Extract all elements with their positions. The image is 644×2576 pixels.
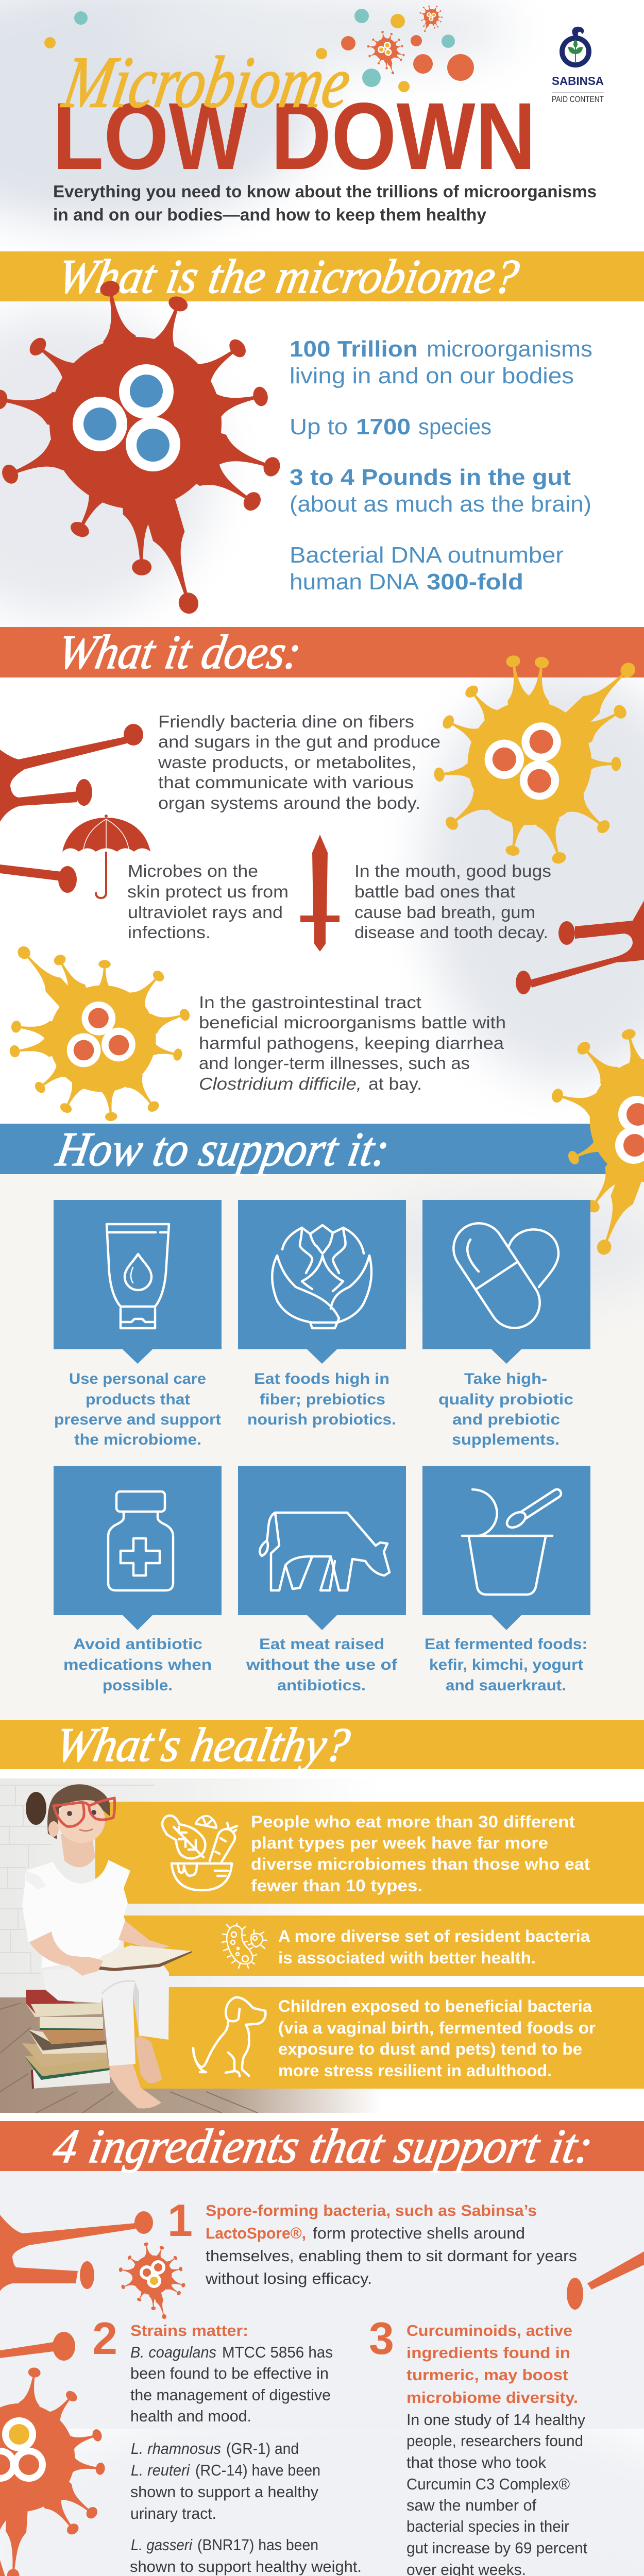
tile: cow: Eat meat raised [259, 1636, 384, 1653]
ingredient 3: Curcuminoids, active [406, 2321, 572, 2340]
ingredient 1: LactoSpore®, [206, 2224, 306, 2242]
text: microbes on the skin [127, 861, 289, 942]
yellow fact band 2 [124, 1916, 644, 1976]
text: microbes on the skin: skin protect us from [127, 882, 289, 901]
feet [135, 2036, 162, 2083]
ingredient 2: the management of digestive [130, 2386, 331, 2404]
tile: artichoke: Eat foods high in [254, 1370, 389, 1387]
tile: cow: without the use of [246, 1656, 398, 1673]
microbiome facts: living in and on our bodies [290, 363, 574, 388]
ingredient 2: (GR-1) and [226, 2439, 299, 2458]
section heading: what's healthy: What's healthy? [52, 1719, 354, 1772]
ingredient 2: been found to be effective in [130, 2364, 329, 2382]
text: in the mouth: In the mouth, good bugs [354, 861, 551, 880]
microbiome facts: 100 Trillion [290, 336, 418, 362]
microbiome facts: 1700 [356, 414, 411, 439]
ingredient 2: (BNR17) has been [197, 2536, 318, 2554]
microbiome facts: microorganisms [427, 336, 592, 362]
tile: yogurt cup [422, 1466, 590, 1694]
tile: personal care tube: Use personal care [69, 1370, 206, 1387]
text: gastrointestinal tract: harmful pathogens, keeping diarrhea [199, 1033, 504, 1053]
ingredient 3: Curcumin C3 Complex® [406, 2475, 570, 2493]
ingredient 2: L. rhamnosus [131, 2439, 221, 2458]
open book [92, 1945, 192, 1968]
text: friendly bacteria: organ systems around the body. [158, 793, 420, 812]
ingredient 2: (RC-14) have been [195, 2461, 320, 2479]
microbiome facts: human DNA [290, 569, 419, 595]
decoration: orange virus arms left [0, 2211, 153, 2361]
header: decorative dots and small viruses [44, 0, 474, 92]
tile: cow [238, 1466, 406, 1694]
text: gastrointestinal tract [199, 993, 506, 1093]
ingredient 3: turmeric, may boost [406, 2366, 568, 2384]
section heading: what is the microbiome: What is the microbiome? [54, 250, 523, 303]
tile: antibiotic bottle: possible. [103, 1677, 173, 1694]
section heading: what it does: What it does: [54, 626, 306, 679]
tile: personal care tube: products that [86, 1391, 190, 1408]
icon: large red virus [0, 278, 284, 618]
text: in the mouth [354, 861, 551, 942]
tile: artichoke: nourish probiotics. [247, 1411, 396, 1428]
icon: yellow virus left [0, 890, 224, 1160]
books stack [22, 1990, 110, 2089]
yellow fact band 1 [95, 1802, 644, 1904]
ingredient 3: bacterial species in their [406, 2517, 569, 2535]
tile: capsule and heart pill: quality probiotic [438, 1391, 573, 1408]
ingredient 2: Strains matter: [130, 2321, 248, 2340]
shirt [22, 1860, 130, 1968]
ingredient 2: health and mood. [130, 2407, 251, 2425]
text: gastrointestinal tract: In the gastrointestinal tract [199, 993, 421, 1012]
ingredient 3 [369, 2313, 587, 2576]
logo: Sabinsa: PAID CONTENT [552, 95, 604, 104]
ingredient 1: 1 [167, 2195, 193, 2246]
tile: antibiotic bottle: medications when [63, 1656, 212, 1673]
tile: artichoke: fiber; prebiotics [260, 1391, 385, 1408]
title: Microbiome [57, 41, 357, 123]
ingredient 2 [92, 2313, 362, 2575]
forearms [29, 1931, 103, 1976]
section heading: how to support it: How to support it: [52, 1123, 394, 1176]
ingredient 2: shown to support a healthy [130, 2483, 318, 2501]
ingredient 3: ingredients found in [406, 2344, 570, 2362]
subtitle: in and on our bodies—and how to keep them healthy [53, 205, 487, 224]
ingredient 3: that those who took [406, 2453, 547, 2471]
icon: orange virus left [0, 2340, 140, 2576]
ingredient 2: L. reuteri [131, 2461, 190, 2479]
photo: girl with red glasses sitting on books [22, 1784, 192, 2109]
decoration: red virus arms left [0, 724, 143, 893]
ingredient 1 [167, 2195, 577, 2287]
tile: antibiotic bottle: Avoid antibiotic [73, 1636, 202, 1653]
ingredient 3: gut increase by 69 percent [406, 2539, 587, 2557]
text: gastrointestinal tract: beneficial microorganisms battle with [199, 1013, 506, 1032]
microbiome facts: Up to [290, 414, 348, 439]
section heading: what it does [0, 626, 644, 679]
ingredient 3: In one study of 14 healthy [406, 2411, 585, 2429]
ingredient 3: microbiome diversity. [406, 2388, 578, 2406]
yellow fact band 1: plant types per week have far more [251, 1834, 548, 1852]
icon: yellow virus right [388, 604, 644, 904]
subtitle [53, 182, 597, 224]
tile: antibiotic bottle [54, 1466, 222, 1694]
ingredient 2: L. gasseri [131, 2536, 193, 2554]
ingredient 1: form protective shells around [313, 2224, 525, 2242]
yellow fact band 3: exposure to dust and pets) tend to be [278, 2040, 582, 2058]
text: in the mouth: disease and tooth decay. [354, 923, 548, 942]
tile: cow: antibiotics. [277, 1677, 366, 1694]
microbiome facts: Bacterial DNA outnumber [290, 543, 564, 568]
microbiome facts: (about as much as the brain) [290, 492, 591, 517]
text: friendly bacteria: that communicate with various [158, 773, 414, 792]
section heading: how to support it [0, 1123, 644, 1176]
text: gastrointestinal tract: at bay. [368, 1074, 422, 1093]
ingredient 3: people, researchers found [406, 2432, 583, 2450]
microbiome facts: 3 to 4 Pounds in the gut [290, 465, 571, 490]
yellow fact band 1: diverse microbiomes than those who eat [251, 1855, 590, 1873]
yellow fact band 3: Children exposed to beneficial bacteria [278, 1997, 592, 2015]
ingredient 2: B. coagulans [130, 2343, 216, 2361]
ingredient 3: 3 [369, 2313, 394, 2364]
decoration: red virus arms right [516, 901, 644, 994]
ingredient 1: themselves, enabling them to sit dormant for years [206, 2247, 577, 2265]
text: friendly bacteria [158, 712, 440, 812]
ingredient 2: 2 [92, 2313, 117, 2364]
yellow fact band 3: more stress resilient in adulthood. [278, 2061, 552, 2080]
text: in the mouth: battle bad ones that [354, 882, 515, 901]
text: microbes on the skin: Microbes on the [128, 861, 258, 880]
logo: Sabinsa [552, 27, 604, 104]
text: microbes on the skin: infections. [128, 923, 211, 942]
text: gastrointestinal tract: and longer-term illnesses, such as [199, 1054, 470, 1073]
decoration: orange virus arm right upper [567, 2251, 644, 2310]
tile: personal care tube: the microbiome. [74, 1431, 201, 1448]
text: gastrointestinal tract: Clostridium difficile, [199, 1074, 362, 1093]
tile: capsule and heart pill: supplements. [452, 1431, 560, 1448]
neck and head [61, 1834, 95, 1867]
section heading: what's healthy [0, 1719, 644, 1772]
tile: yogurt cup: kefir, kimchi, yogurt [429, 1656, 583, 1673]
icon: sword [300, 835, 340, 952]
tile: yogurt cup: and sauerkraut. [446, 1677, 566, 1694]
microbiome facts: species [418, 414, 492, 439]
microbiome facts: 300-fold [427, 569, 523, 595]
icon: yellow virus crossing blue bar [483, 974, 644, 1297]
yellow fact band 2: A more diverse set of resident bacteria [278, 1927, 590, 1945]
photo background: brick wall and wooden floor [0, 1778, 382, 2113]
text: microbes on the skin: ultraviolet rays and [128, 903, 283, 922]
text: in the mouth: cause bad breath, gum [354, 903, 535, 922]
section heading: 4 ingredients: 4 ingredients that support it: [49, 2120, 597, 2173]
icon: umbrella [62, 815, 150, 898]
logo: Sabinsa: SABINSA [552, 74, 604, 88]
yellow fact band 1: fewer than 10 types. [251, 1876, 422, 1895]
yellow fact band 2: is associated with better health. [278, 1948, 536, 1967]
text: friendly bacteria: waste products, or metabolites, [158, 753, 416, 772]
ingredient 1: Spore-forming bacteria, such as Sabinsa’s [206, 2201, 537, 2219]
text: friendly bacteria: Friendly bacteria dine on fibers [158, 712, 414, 731]
tile: personal care tube: preserve and support [54, 1411, 221, 1428]
trousers [42, 1965, 169, 2066]
tile: yogurt cup: Eat fermented foods: [425, 1636, 587, 1653]
tile: capsule and heart pill: Take high- [464, 1370, 547, 1387]
tile: personal care tube [54, 1200, 222, 1448]
text: friendly bacteria: and sugars in the gut and produce [158, 732, 440, 751]
tile: artichoke [238, 1200, 406, 1428]
tile: capsule and heart pill [422, 1200, 590, 1448]
ingredient 2: MTCC 5856 has [222, 2343, 333, 2361]
yellow fact band 1: People who eat more than 30 different [251, 1812, 575, 1831]
subtitle: Everything you need to know about the trillions of microorganisms [53, 182, 597, 201]
ingredient 3: saw the number of [406, 2496, 536, 2514]
yellow fact band 3: (via a vaginal birth, fermented foods or [278, 2019, 596, 2037]
ingredient 2: shown to support healthy weight. [130, 2557, 362, 2575]
decoration: orange virus arms lower left [0, 2560, 110, 2576]
red glasses [54, 1798, 115, 1826]
title: LOW DOWN [53, 83, 536, 190]
yellow fact band 3 [129, 1987, 644, 2089]
tile: capsule and heart pill: and prebiotic [452, 1411, 560, 1428]
title [53, 41, 536, 190]
microbiome facts [290, 336, 592, 595]
ingredient 1: without losing efficacy. [205, 2269, 372, 2287]
icon: small orange virus [118, 2242, 187, 2320]
ingredient 2: urinary tract. [130, 2504, 216, 2522]
